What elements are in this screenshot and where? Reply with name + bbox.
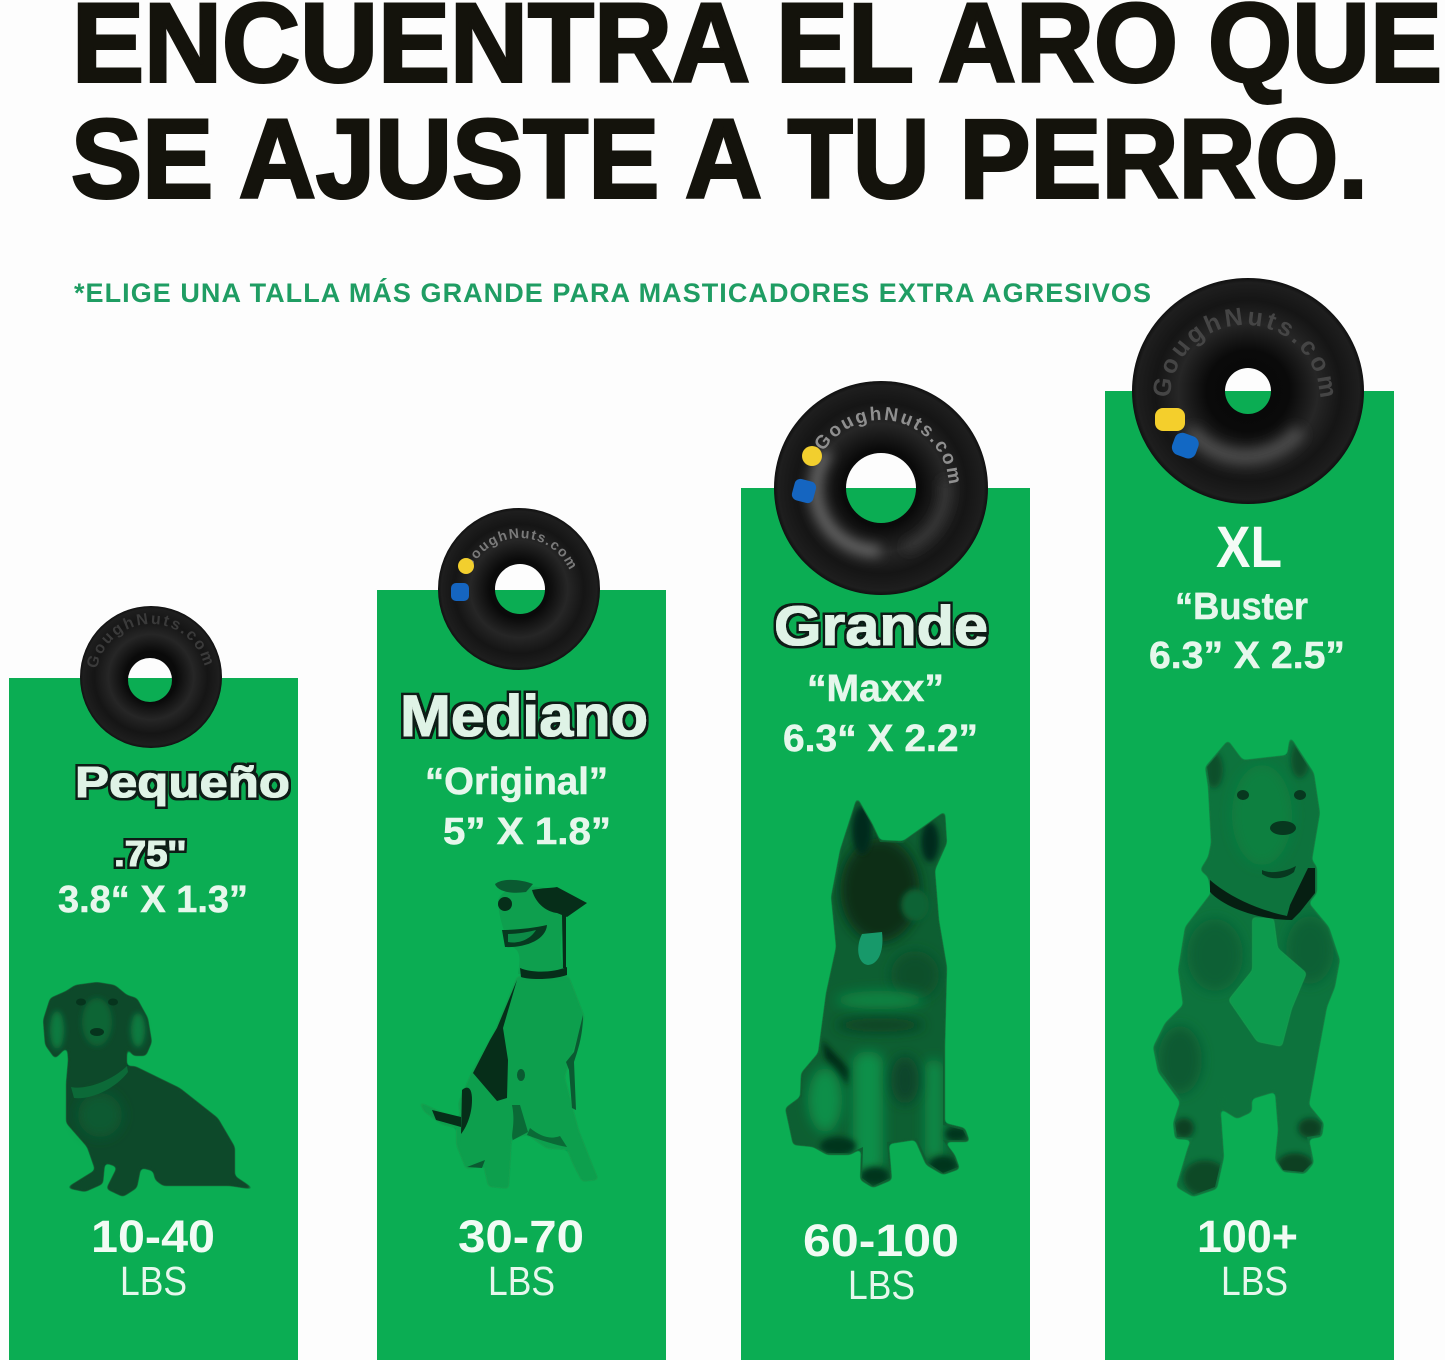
unit: LBS (1221, 1258, 1288, 1304)
icon: large ring: GoughNuts.com (816, 406, 959, 484)
panel: grande (741, 381, 1030, 1360)
bar (9, 678, 298, 1360)
bar (1105, 391, 1394, 1360)
icon: medium dog (418, 880, 599, 1189)
heading: Pequeño (75, 758, 290, 807)
icon: pit bull (1153, 736, 1340, 1197)
name: “Buster (1175, 586, 1308, 628)
heading: Grande (774, 594, 988, 657)
bar (377, 590, 666, 1360)
collar (1210, 868, 1315, 920)
chest patch (1228, 917, 1307, 1047)
weight: 60-100 (803, 1215, 959, 1266)
weight: 100+ (1197, 1211, 1298, 1262)
icon: small ring: GoughNuts.com (87, 613, 212, 667)
heading: XL (1216, 515, 1282, 580)
blue plug (791, 478, 817, 504)
icon: large ring (774, 381, 988, 595)
dimensions: 6.3” X 2.5” (1149, 635, 1345, 677)
dimensions: 5” X 1.8” (443, 811, 611, 853)
icon: XL ring (1132, 278, 1364, 504)
panel: XL (1105, 278, 1394, 1360)
yellow plug (1155, 408, 1185, 431)
icon: german shepherd (785, 797, 970, 1188)
title: SE AJUSTE A TU PERRO. (71, 96, 1368, 222)
title (71, 0, 1442, 222)
heading: Mediano (400, 684, 648, 749)
icon: dachshund (43, 982, 256, 1197)
subtitle note: *ELIGE UNA TALLA MÁS GRANDE PARA MASTICADORES EXTRA AGRESIVOS (74, 277, 1151, 308)
dimensions: 6.3“ X 2.2” (783, 718, 978, 760)
weight: 10-40 (91, 1211, 215, 1262)
weight: 30-70 (458, 1211, 584, 1262)
yellow plug (802, 446, 822, 466)
panel: pequeño (9, 606, 298, 1360)
icon: XL ring: GoughNuts.com (1154, 308, 1334, 397)
icon: medium ring: GoughNuts.com (468, 528, 575, 570)
unit: LBS (488, 1258, 555, 1304)
name: “Original” (425, 761, 608, 803)
bar (741, 488, 1030, 1360)
unit: LBS (120, 1258, 187, 1304)
icon: small ring (80, 606, 222, 748)
tongue (858, 932, 882, 965)
icon: medium ring (438, 508, 600, 670)
face (1237, 790, 1306, 878)
name: .75'' (114, 833, 186, 874)
panel: mediano (377, 508, 666, 1360)
name: “Maxx” (807, 668, 944, 710)
dimensions: 3.8“ X 1.3” (58, 879, 248, 921)
unit: LBS (848, 1262, 915, 1308)
yellow plug (458, 558, 474, 574)
blue plug (451, 583, 469, 601)
blue plug (1170, 431, 1201, 461)
